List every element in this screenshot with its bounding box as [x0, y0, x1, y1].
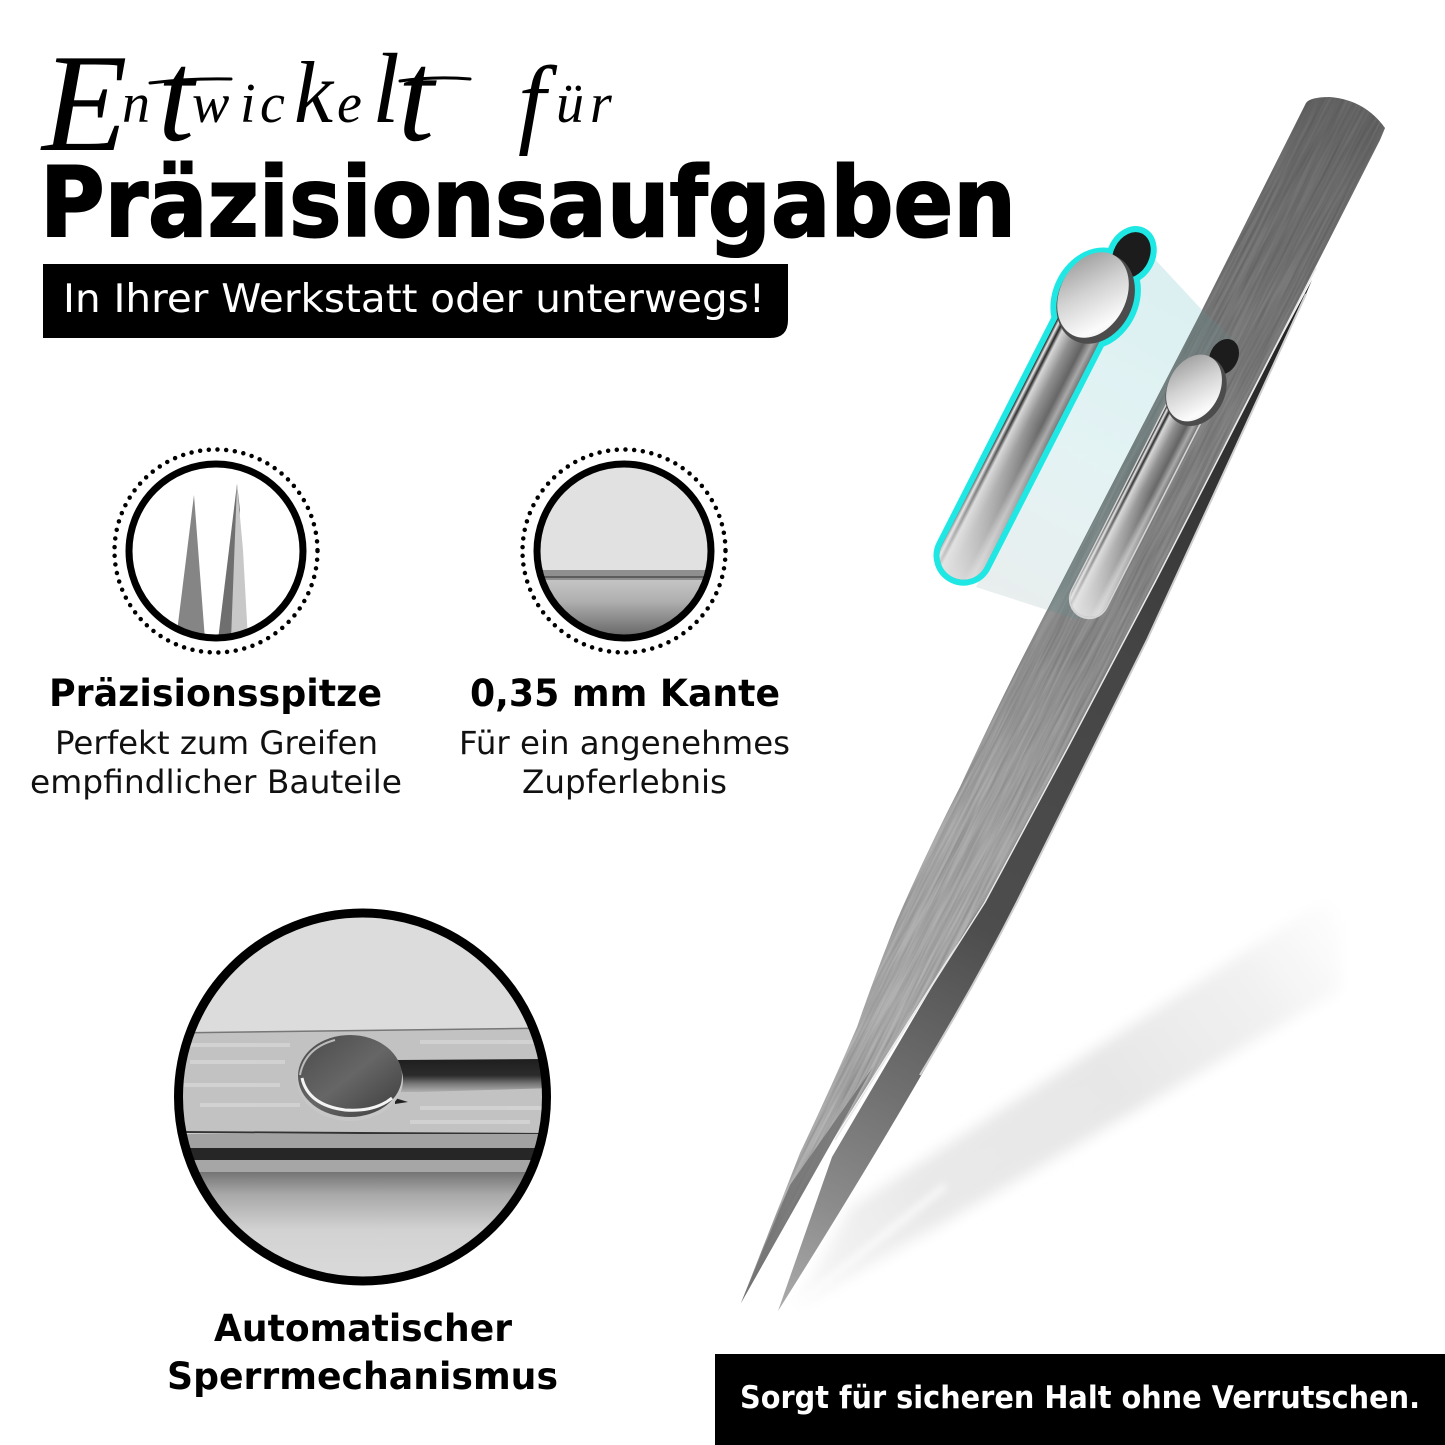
lower blade facet [741, 1067, 873, 1303]
front blade [741, 97, 1385, 1303]
tweezers shadow [795, 890, 1340, 1308]
script heading: Entwickelt für: n [122, 73, 150, 135]
blade slot with pin [1055, 323, 1250, 630]
photo circle: automatic locking mechanism [170, 905, 555, 1290]
slot [396, 1059, 555, 1092]
subtitle banner: In Ihrer Werkstatt oder unterwegs! [63, 277, 765, 322]
footer banner [715, 1354, 1445, 1445]
tweezers [741, 97, 1385, 1311]
back blade [778, 280, 1312, 1311]
caption: Automatischer Sperrmechanismus [167, 1307, 558, 1398]
script heading: Entwickelt für: r [590, 73, 612, 135]
script heading: Entwickelt für: l [372, 33, 400, 144]
icon: 0.35 mm edge circle [522, 450, 726, 652]
metal bar [170, 1028, 555, 1134]
text: Präzisionsspitze feature: empfindlicher Bauteile [30, 763, 402, 801]
script heading: Entwickelt für [40, 25, 612, 181]
script heading: Entwickelt für: E [40, 26, 128, 181]
magnified pin callout with cyan outline [921, 211, 1164, 594]
script heading: Entwickelt für: t [158, 25, 197, 169]
script heading: Entwickelt für: k [294, 45, 335, 142]
caption: Automatischer Sperrmechanismus: Automatischer [214, 1307, 513, 1350]
subtitle banner [43, 264, 788, 338]
script heading: Entwickelt für: e [337, 73, 362, 135]
script heading: Entwickelt für: i [240, 73, 256, 135]
script heading: Entwickelt für: w [192, 73, 229, 135]
text: Präzisionsspitze feature [30, 672, 402, 801]
script heading: Entwickelt für: ü [556, 73, 584, 135]
caption: Automatischer Sperrmechanismus: Sperrmechanismus [167, 1355, 558, 1398]
text: Präzisionsspitze feature: Präzisionsspitze [49, 672, 382, 715]
main heading: Präzisionsaufgaben: Präzisionsaufgaben [40, 147, 1016, 259]
script heading: Entwickelt für: f [518, 46, 558, 157]
text: 0,35 mm Kante feature: Für ein angenehmes [459, 724, 790, 762]
icon: precision tip circle [114, 450, 318, 652]
text: 0,35 mm Kante feature: 0,35 mm Kante [470, 672, 780, 715]
script heading: Entwickelt für: c [260, 73, 285, 135]
text: 0,35 mm Kante feature [459, 672, 790, 801]
text: 0,35 mm Kante feature: Zupferlebnis [522, 763, 727, 801]
zoom connector highlight [976, 255, 1202, 610]
script heading: Entwickelt für: t [398, 25, 437, 169]
teal tint on blade [1047, 310, 1240, 620]
blade brushing [744, 97, 1383, 1296]
text: Präzisionsspitze feature: Perfekt zum Greifen [55, 724, 378, 762]
disc [395, 1069, 403, 1102]
